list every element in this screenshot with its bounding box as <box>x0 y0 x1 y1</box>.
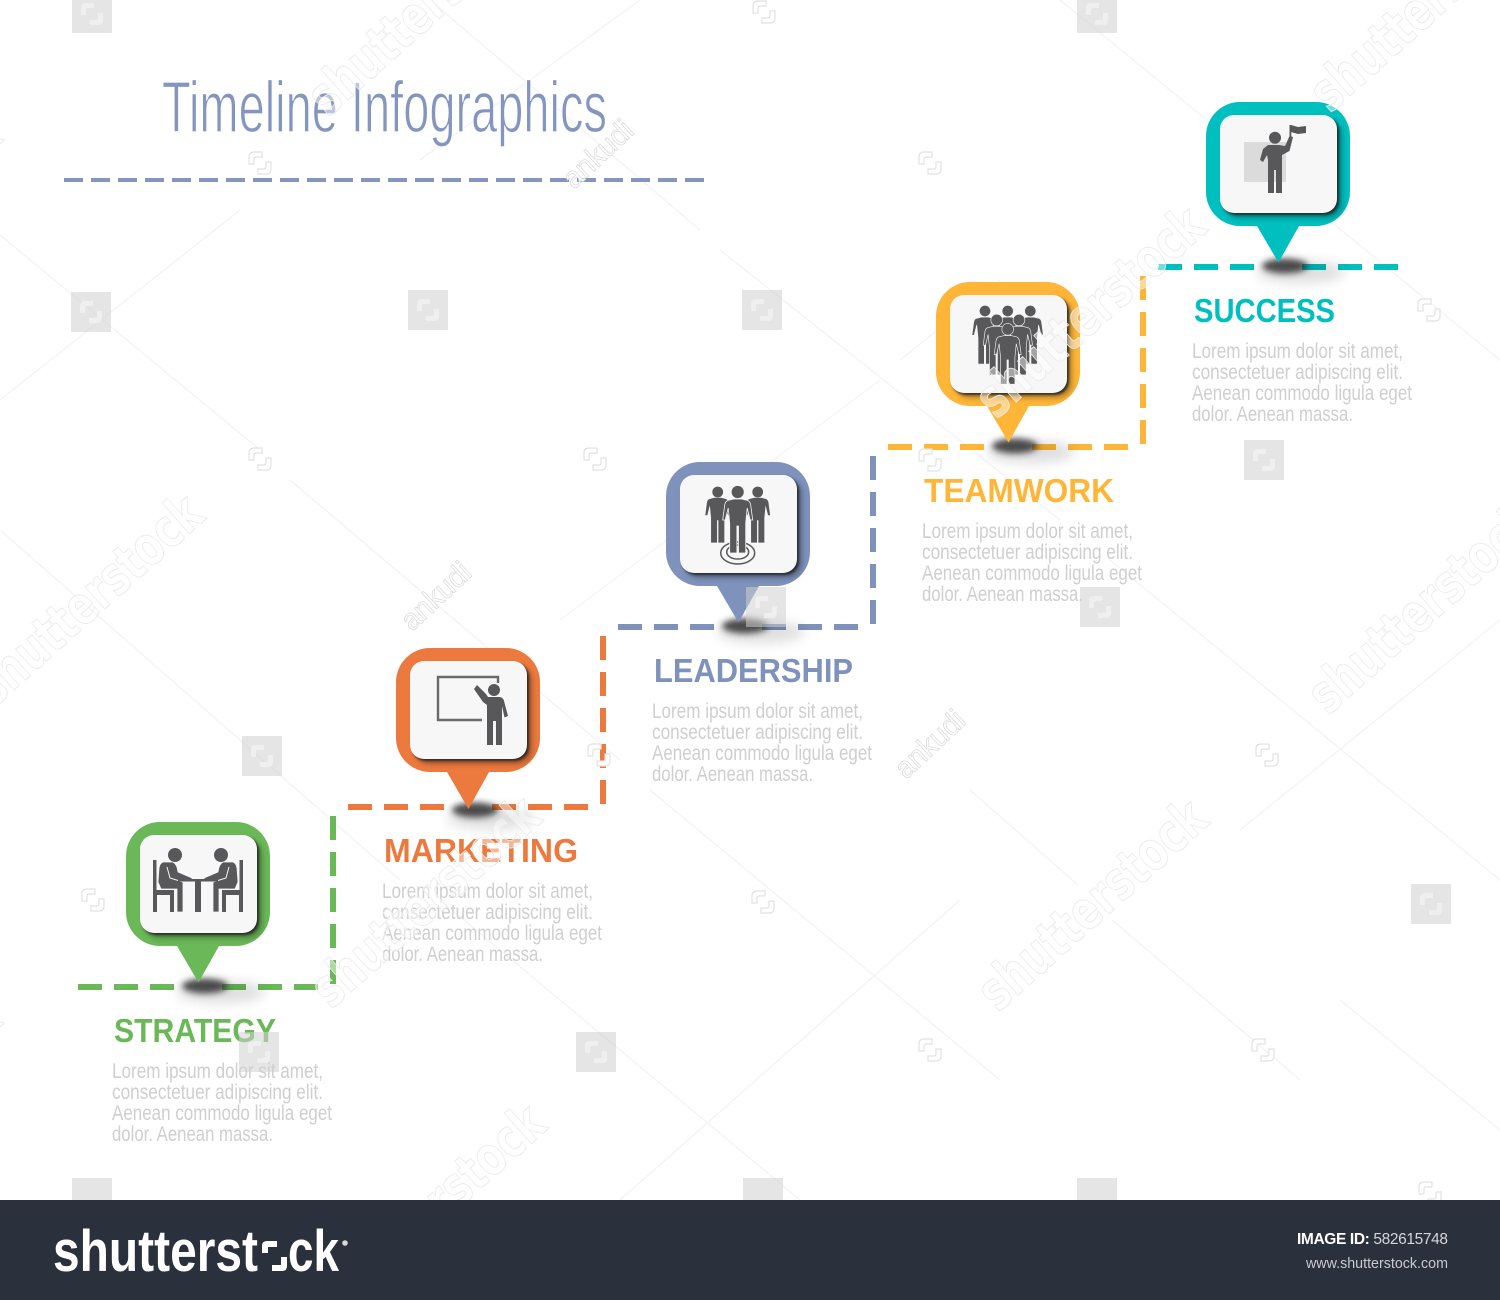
text: teamwork description <box>922 520 1142 606</box>
step 3: leadership connector <box>618 456 873 627</box>
watermark: square logo marks <box>80 3 1442 1063</box>
step 5: success connector <box>1158 264 1398 270</box>
footer image id: IMAGE ID: 582615748 <box>1297 1231 1448 1248</box>
text: marketing description <box>382 880 602 966</box>
text: teamwork description: Aenean commodo ligula eget <box>922 562 1142 585</box>
text: marketing description: consectetuer adipiscing elit. <box>382 901 593 924</box>
text: leadership description: Lorem ipsum dolor sit amet, <box>652 700 863 723</box>
heading: strategy: STRATEGY <box>114 1012 276 1049</box>
pin: leadership <box>666 462 810 643</box>
watermark: shutterstock text: shutterstock <box>963 193 1218 430</box>
text: strategy description: Lorem ipsum dolor sit amet, <box>112 1060 323 1083</box>
text: marketing description: dolor. Aenean massa. <box>382 943 543 966</box>
watermark: shutterstock text: shutterstock <box>298 783 553 1020</box>
text: teamwork description: Lorem ipsum dolor sit amet, <box>922 520 1133 543</box>
text: success description: consectetuer adipiscing elit. <box>1192 361 1403 384</box>
text: success description: dolor. Aenean massa. <box>1192 403 1353 426</box>
pin: strategy <box>126 822 270 1003</box>
text: strategy description <box>112 1060 332 1146</box>
footer logo: shutterst <box>53 1219 258 1284</box>
text: teamwork description: dolor. Aenean massa. <box>922 583 1083 606</box>
step 4: teamwork connector <box>888 276 1143 447</box>
text: success description: Lorem ipsum dolor sit amet, <box>1192 340 1403 363</box>
text: strategy description: consectetuer adipiscing elit. <box>112 1081 323 1104</box>
watermark: shutterstock text: shutterstock <box>965 786 1220 1023</box>
text: strategy description: Aenean commodo ligula eget <box>112 1102 332 1125</box>
pin: success <box>1206 102 1350 283</box>
watermark: contributor name: ankudi <box>888 704 972 785</box>
step 2: marketing connector <box>348 636 603 807</box>
watermark: contributor name <box>394 114 972 785</box>
text: leadership description <box>652 700 872 786</box>
watermark: contributor name: ankudi <box>556 114 640 195</box>
watermark square inside pin <box>1244 142 1286 182</box>
text: leadership description: Aenean commodo ligula eget <box>652 742 872 765</box>
pin: marketing <box>396 648 540 829</box>
title dashed rule <box>64 178 704 182</box>
heading: teamwork: TEAMWORK <box>924 472 1114 509</box>
icon: person with flag <box>1260 125 1306 193</box>
text: strategy description: dolor. Aenean massa. <box>112 1123 273 1146</box>
text: success description <box>1192 340 1412 426</box>
footer bar <box>0 1200 1500 1300</box>
pin: teamwork <box>936 282 1080 463</box>
step 1: strategy connector <box>78 816 333 987</box>
icon: group of people <box>972 305 1043 384</box>
icon: two people at a table <box>153 848 243 912</box>
text: leadership description: consectetuer adipiscing elit. <box>652 721 863 744</box>
icon: leader with team on target <box>705 486 770 564</box>
icon: presenter at board <box>438 677 508 745</box>
footer url: www.shutterstock.com <box>1305 1256 1448 1272</box>
title: Timeline Infographics <box>162 68 607 148</box>
text: marketing description: Lorem ipsum dolor sit amet, <box>382 880 593 903</box>
watermark: contributor name: ankudi <box>394 556 478 637</box>
text: teamwork description: consectetuer adipiscing elit. <box>922 541 1133 564</box>
heading: leadership: LEADERSHIP <box>654 652 853 689</box>
heading: success: SUCCESS <box>1194 292 1335 329</box>
text: leadership description: dolor. Aenean massa. <box>652 763 813 786</box>
text: marketing description: Aenean commodo ligula eget <box>382 922 602 945</box>
text: success description: Aenean commodo ligula eget <box>1192 382 1412 405</box>
footer logo: ck <box>288 1219 340 1284</box>
heading: marketing: MARKETING <box>384 832 578 869</box>
